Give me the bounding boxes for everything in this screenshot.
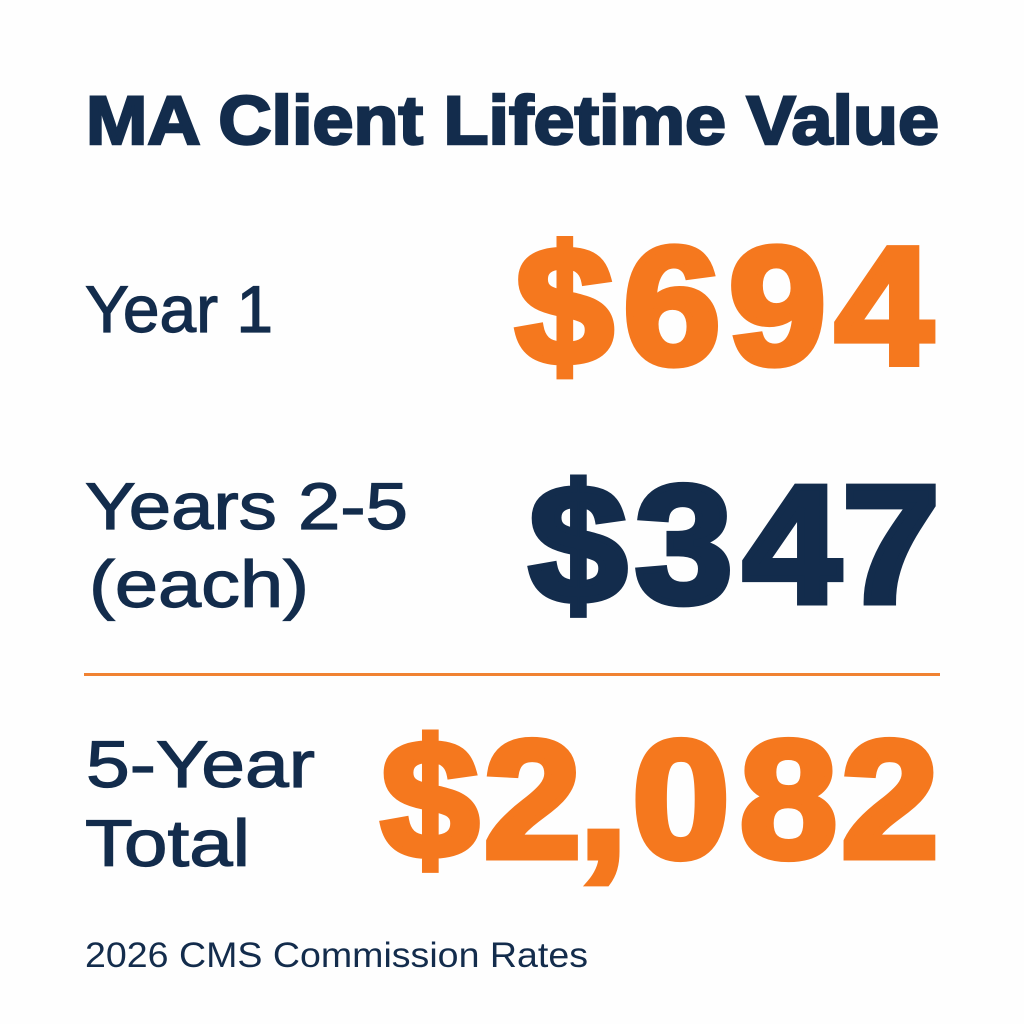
row: years 2-5: [85, 452, 940, 638]
label: 5-year total: Total: [85, 806, 250, 880]
row: year 1: [85, 213, 933, 400]
footnote: 2026 CMS Commission Rates: [85, 936, 588, 975]
label: year 1: Year 1: [85, 272, 273, 346]
label: 5-year total: 5-Year: [86, 727, 315, 801]
value: $347: $347: [529, 452, 940, 638]
label: years 2-5 each: (each): [89, 547, 309, 621]
title: MA Client Lifetime Value: [86, 82, 939, 159]
label: years 2-5 each: [85, 469, 408, 621]
value: $2,082: $2,082: [381, 707, 939, 893]
value: $694: $694: [516, 213, 933, 400]
divider: [84, 673, 940, 676]
label: years 2-5 each: Years 2-5: [85, 469, 408, 543]
row: 5-year total: [85, 707, 939, 893]
label: 5-year total: [85, 727, 315, 880]
